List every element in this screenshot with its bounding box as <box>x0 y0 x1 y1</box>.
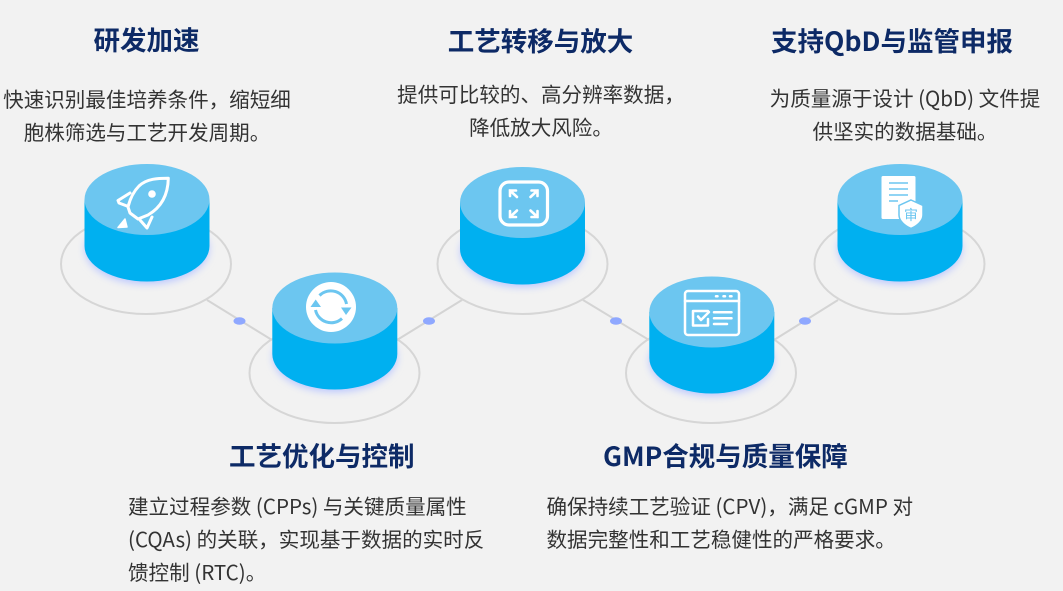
text: GMP合规与质量保障 description: 确保持续工艺验证 (CPV)，满足 cGMP 对 <box>546 490 913 520</box>
text: 工艺优化与控制 description: 建立过程参数 (CPPs) 与关键质量属性 <box>128 490 467 520</box>
cylinder 1: rocket <box>61 164 231 314</box>
text: 工艺转移与放大 description: 提供可比较的、高分辨率数据， <box>397 78 685 108</box>
icon: expand frame <box>500 182 548 225</box>
text: 工艺转移与放大 description: 降低放大风险。 <box>469 111 613 141</box>
title: 支持QbD与监管申报: 支持QbD与监管申报 <box>771 20 1013 59</box>
icon: document and shield <box>882 176 923 228</box>
cylinder 4: checklist window <box>626 276 796 423</box>
text: 支持QbD description: 供坚实的数据基础。 <box>813 115 997 145</box>
text: 支持QbD description <box>770 82 1040 145</box>
cylinder 5: document with shield <box>814 164 984 314</box>
text: 研发加速 description: 快速识别最佳培养条件，缩短细 <box>3 83 291 113</box>
text: 工艺优化与控制 description: (CQAs) 的关联，实现基于数据的实时反 <box>128 523 484 553</box>
text: 研发加速 description <box>3 83 291 146</box>
text: 研发加速 description: 胞株筛选与工艺开发周期。 <box>24 116 270 146</box>
cylinder 2: cycle <box>250 272 420 423</box>
cylinder 3: scale up <box>438 167 608 314</box>
icon: rocket <box>118 178 168 228</box>
text: 工艺转移与放大 description <box>397 78 685 141</box>
icon: window with checklist <box>685 291 739 335</box>
text: 工艺优化与控制 description: 馈控制 (RTC)。 <box>128 556 266 586</box>
icon: refresh circle <box>306 282 356 332</box>
title: 工艺优化与控制: 工艺优化与控制 <box>229 435 414 474</box>
text: GMP合规与质量保障 description: 数据完整性和工艺稳健性的严格要求。 <box>546 523 896 553</box>
icon: document and shield: 审 <box>904 205 918 225</box>
title: 工艺转移与放大: 工艺转移与放大 <box>448 20 633 59</box>
connector lines and dots <box>207 300 838 340</box>
title: 研发加速: 研发加速 <box>94 19 200 58</box>
text: 支持QbD description: 为质量源于设计 (QbD) 文件提 <box>770 82 1040 112</box>
text: 工艺优化与控制 description <box>128 490 484 586</box>
title: GMP合规与质量保障: GMP合规与质量保障 <box>603 435 848 474</box>
text: GMP合规与质量保障 description <box>546 490 913 553</box>
